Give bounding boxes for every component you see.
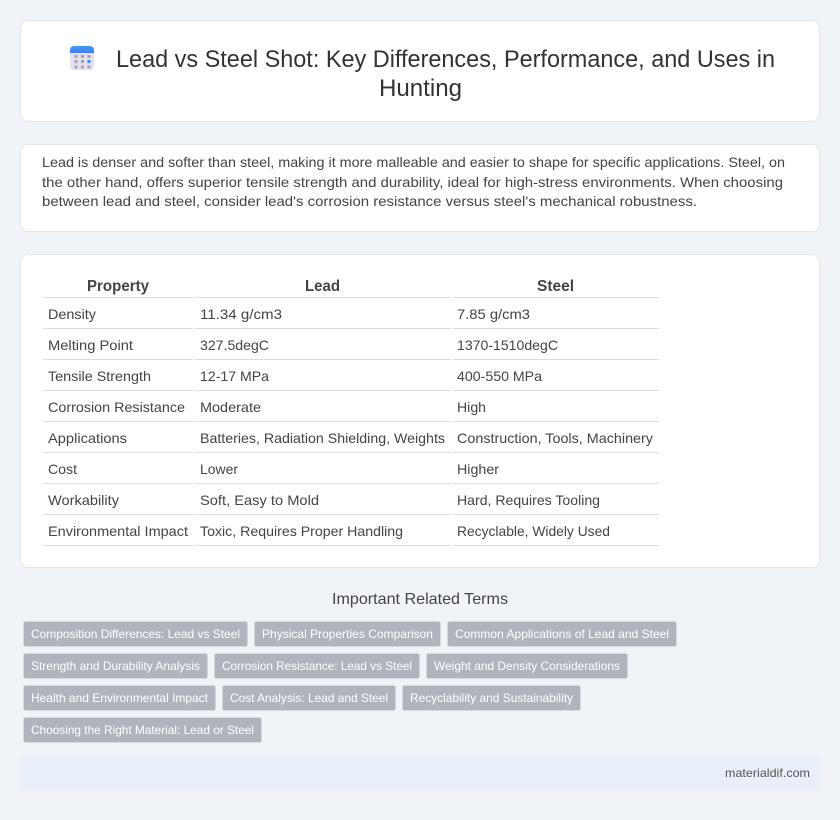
description text: between lead and steel, consider lead's corrosion resistance versus steel's mechanical robustness.	[42, 193, 697, 209]
description text: the other hand, offers superior tensile strength and durability, ideal for high-stress environments. When choosing	[42, 174, 783, 190]
row: environmental impact: Recyclable, Widely Used	[457, 523, 610, 539]
tag	[24, 718, 262, 742]
row: cost: Cost	[48, 461, 77, 477]
row: corrosion resistance	[48, 399, 486, 415]
title: Lead vs Steel Shot: Key Differences, Performance, and Uses in	[116, 46, 775, 73]
description text: Lead is denser and softer than steel, making it more malleable and easier to shape for specific applications. Steel, on	[42, 154, 785, 170]
tag	[24, 622, 248, 646]
row: tensile strength	[48, 368, 542, 384]
tag	[402, 686, 580, 710]
row: applications: Applications	[48, 430, 127, 446]
description panel	[20, 144, 820, 232]
row: tensile strength: Tensile Strength	[48, 368, 151, 384]
row: melting point: 1370-1510degC	[457, 337, 558, 353]
table header row: Steel	[537, 278, 574, 295]
row: workability	[48, 492, 600, 508]
row: tensile strength: 400-550 MPa	[457, 368, 542, 384]
comparison table	[43, 278, 659, 546]
row: workability: Workability	[48, 492, 119, 508]
tag	[426, 654, 628, 678]
table panel	[20, 254, 820, 568]
footer bar	[20, 756, 820, 790]
row: cost: Higher	[457, 461, 499, 477]
row: cost	[48, 461, 499, 477]
row: applications: Construction, Tools, Machinery	[457, 430, 653, 446]
related terms tags	[24, 622, 676, 742]
row: applications	[48, 430, 653, 446]
row: applications: Batteries, Radiation Shielding, Weights	[200, 430, 445, 446]
row: environmental impact: Toxic, Requires Proper Handling	[200, 523, 403, 539]
row: melting point: 327.5degC	[200, 337, 269, 353]
tag: Composition Differences: Lead vs Steel	[31, 627, 240, 641]
tag	[448, 622, 676, 646]
row: corrosion resistance: Corrosion Resistance	[48, 399, 185, 415]
tag: Cost Analysis: Lead and Steel	[230, 691, 388, 705]
tag: Recyclability and Sustainability	[410, 691, 573, 705]
footer source text: materialdif.com	[725, 766, 810, 780]
row: environmental impact: Environmental Impact	[48, 523, 188, 539]
row: density: 11.34 g/cm3	[200, 306, 282, 322]
row: workability: Hard, Requires Tooling	[457, 492, 600, 508]
row: density	[48, 306, 530, 322]
tag: Strength and Durability Analysis	[31, 659, 200, 673]
row: melting point	[48, 337, 558, 353]
tag	[214, 654, 420, 678]
title: Hunting	[379, 75, 462, 102]
table header row: Property	[87, 278, 149, 295]
tag: Health and Environmental Impact	[31, 691, 209, 705]
tag: Choosing the Right Material: Lead or Steel	[31, 723, 254, 737]
row: density: 7.85 g/cm3	[457, 306, 530, 322]
icon: calendar	[70, 46, 94, 70]
tag: Common Applications of Lead and Steel	[455, 627, 669, 641]
tag	[222, 686, 396, 710]
table header row	[87, 278, 574, 295]
tag	[24, 654, 208, 678]
table header row: Lead	[305, 278, 340, 295]
tag: Weight and Density Considerations	[434, 659, 620, 673]
row: density: Density	[48, 306, 96, 322]
row: cost: Lower	[200, 461, 238, 477]
tag	[254, 622, 440, 646]
related terms heading: Important Related Terms	[332, 591, 508, 608]
row: melting point: Melting Point	[48, 337, 133, 353]
row: workability: Soft, Easy to Mold	[200, 492, 319, 508]
row: tensile strength: 12-17 MPa	[200, 368, 269, 384]
row: environmental impact	[48, 523, 610, 539]
tag: Physical Properties Comparison	[262, 627, 433, 641]
row: corrosion resistance: High	[457, 399, 486, 415]
tag: Corrosion Resistance: Lead vs Steel	[222, 659, 412, 673]
header panel	[20, 20, 820, 122]
row: corrosion resistance: Moderate	[200, 399, 261, 415]
tag	[24, 686, 216, 710]
